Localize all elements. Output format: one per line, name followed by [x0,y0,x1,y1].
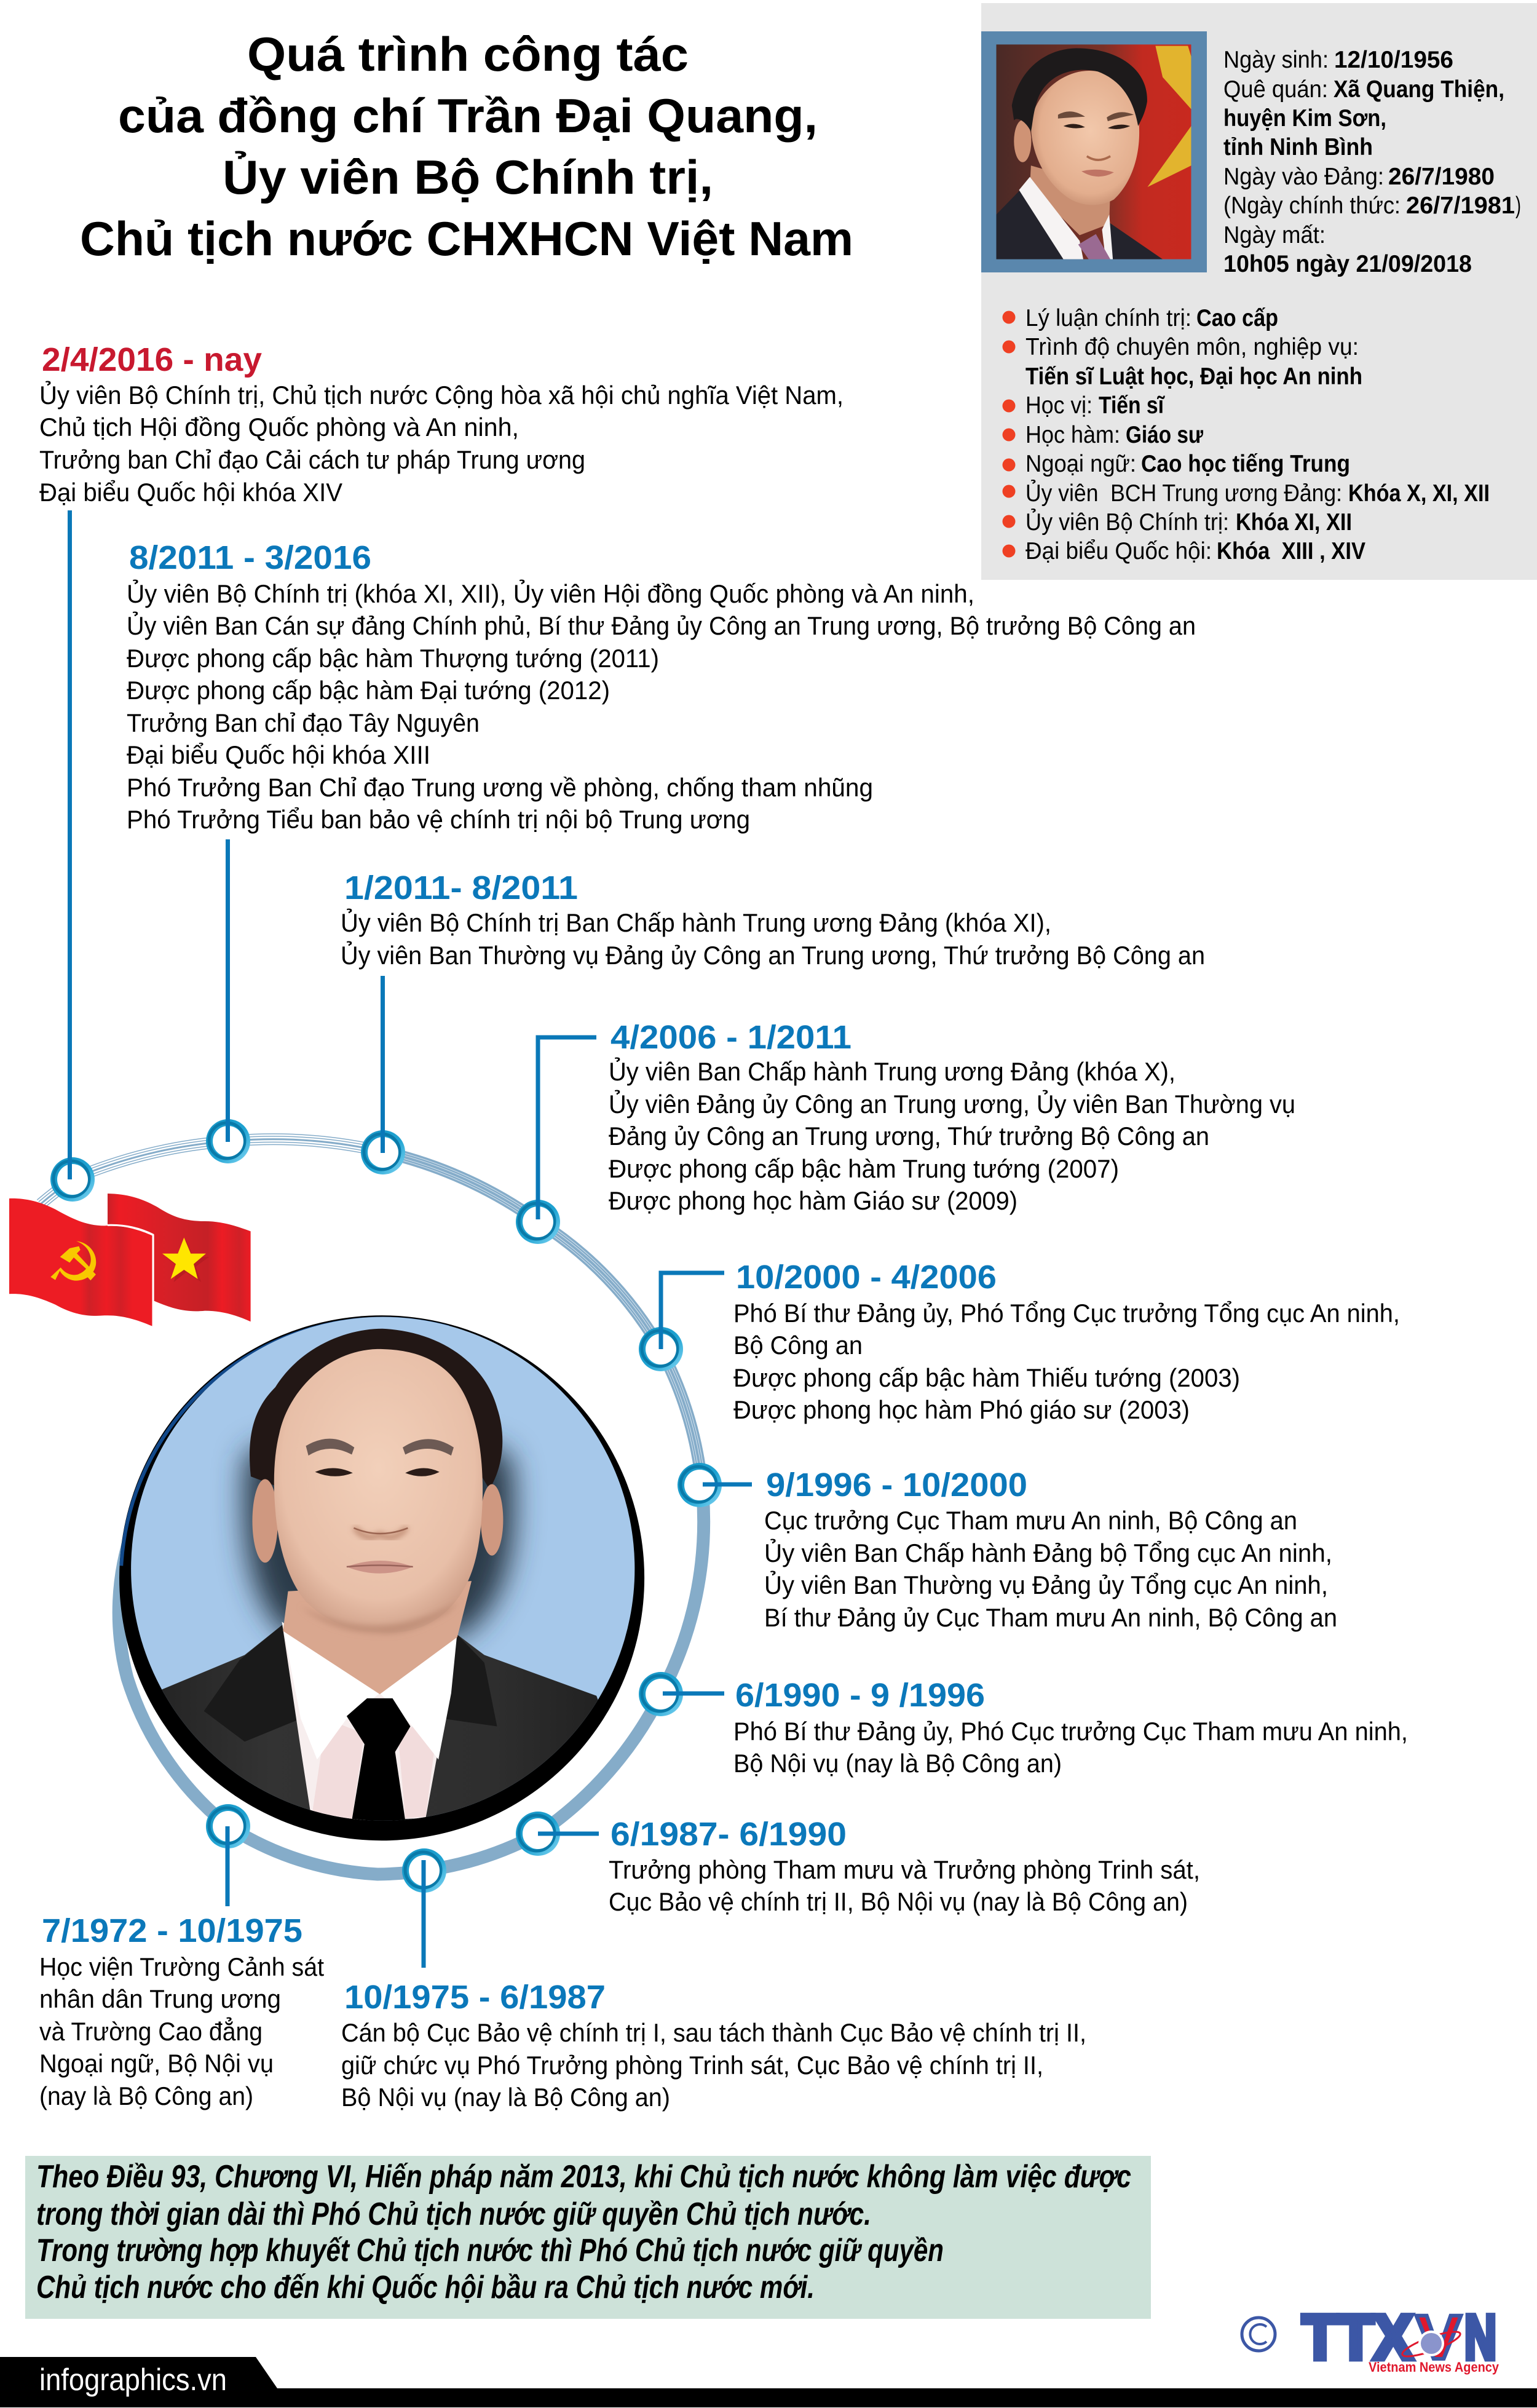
milestone: 4/2006 - 1/2011 [609,1019,1295,1215]
milestone: 10/1975 - 6/1987: giữ chức vụ Phó Trưởng phòng Trinh sát, Cục Bảo vệ chính trị II, [341,2051,1043,2080]
milestone: 10/2000 - 4/2006: 10/2000 - 4/2006 [736,1259,997,1296]
milestone: 9/1996 - 10/2000: Cục trưởng Cục Tham mưu An ninh, Bộ Công an [764,1506,1297,1535]
logo: TTXVN: N [1464,2302,1496,2372]
milestone: 6/1990 - 9/1996: Bộ Nội vụ (nay là Bộ Công an) [733,1749,1062,1778]
milestone: 4/2006 - 1/2011: Ủy viên Đảng ủy Công an Trung ương, Ủy viên Ban Thường vụ [609,1089,1295,1119]
node and connector: 1987 [516,1812,599,1856]
milestone: 10/2000 - 4/2006: Bộ Công an [733,1331,863,1360]
milestone: 7/1972 - 10/1975: 7/1972 - 10/1975 [42,1912,302,1949]
timeline ring [41,1139,704,1874]
milestone: 6/1990 - 9/1996: Phó Bí thư Đảng ủy, Phó Cục trưởng Cục Tham mưu An ninh, [733,1717,1408,1746]
credentials list: Cao học tiếng Trung [1141,451,1350,477]
credentials list: Trình độ chuyên môn, nghiệp vụ: [1025,334,1359,360]
milestone: 8/2011 - 3/2016: Đại biểu Quốc hội khóa XIII [127,740,430,769]
milestone: 10/2000 - 4/2006 [733,1259,1400,1424]
personal details: ) [1515,192,1521,219]
personal details: 26/7/1980 [1388,164,1495,190]
milestone: 10/2000 - 4/2006: Phó Bí thư Đảng ủy, Phó Tổng Cục trưởng Tổng cục An ninh, [733,1299,1400,1328]
milestone: 7/1972 - 10/1975 [39,1912,324,2110]
milestone: 8/2011 - 3/2016: Được phong cấp bậc hàm Đại tướng (2012) [127,676,610,705]
logo: TTXVN: V [1416,2302,1461,2372]
milestone: 2/4/2016 - nay: Đại biểu Quốc hội khóa XIV [39,478,342,507]
credentials list: Khóa XIII , XIV [1217,538,1365,564]
footer bar: infographics.vn [39,2362,227,2397]
credentials list: Lý luận chính trị: [1025,305,1191,331]
milestone: 7/1972 - 10/1975: Ngoại ngữ, Bộ Nội vụ [39,2049,274,2078]
callout: constitution note: Theo Điều 93, Chương VI, Hiến pháp năm 2013, khi Chủ tịch nước không làm việc được [36,2159,1131,2195]
milestone: 8/2011 - 3/2016: 8/2011 - 3/2016 [129,539,371,576]
milestone: 7/1972 - 10/1975: Học viện Trường Cảnh sát [39,1952,324,1981]
milestone: 6/1987 - 6/1990: Cục Bảo vệ chính trị II, Bộ Nội vụ (nay là Bộ Công an) [609,1887,1188,1916]
personal details: 10h05 ngày 21/09/2018 [1223,251,1472,277]
central portrait [119,1315,644,1841]
milestone: 4/2006 - 1/2011: 4/2006 - 1/2011 [610,1019,851,1056]
node and connector: 1975 [402,1848,446,1968]
icon: copyright [1242,2318,1275,2351]
credentials list: Ủy viên Bộ Chính trị: [1025,509,1229,536]
milestone: 7/1972 - 10/1975: (nay là Bộ Công an) [39,2081,253,2110]
milestone: 8/2011 - 3/2016: Phó Trưởng Ban Chỉ đạo Trung ương về phòng, chống tham nhũng [127,773,873,802]
node and connector: 1996 [678,1463,752,1507]
milestone: 7/1972 - 10/1975: nhân dân Trung ương [39,1984,281,2013]
callout: constitution note: Trong trường hợp khuyết Chủ tịch nước thì Phó Chủ tịch nước giữ quyền [36,2233,944,2268]
flag: Communist Party [9,1198,152,1326]
callout: constitution note: trong thời gian dài thì Phó Chủ tịch nước giữ quyền Chủ tịch nước. [36,2196,871,2232]
credentials list: Ngoại ngữ: [1025,451,1136,477]
milestone: 7/1972 - 10/1975: và Trường Cao đẳng [39,2016,263,2046]
credentials list: Ủy viên BCH Trung ương Đảng: [1025,480,1342,507]
portrait photo frame [981,31,1207,272]
logo: TTXVN: TTX [1302,2302,1413,2372]
milestone: 2/4/2016 - nay: Chủ tịch Hội đồng Quốc phòng và An ninh, [39,413,519,442]
milestone: 6/1987 - 6/1990: Trưởng phòng Tham mưu và Trưởng phòng Trinh sát, [609,1855,1200,1884]
milestone: 6/1990 - 9/1996: 6/1990 - 9 /1996 [735,1677,985,1714]
milestone: 6/1987 - 6/1990: 6/1987- 6/1990 [610,1816,847,1853]
personal details [1223,47,1521,277]
credentials list: Tiến sĩ Luật học, Đại học An ninh [1025,363,1362,390]
milestone: 2/4/2016 - nay [39,341,844,507]
credentials list: Khóa XI, XII [1236,509,1352,536]
milestone: 6/1990 - 9/1996 [733,1677,1408,1778]
credentials list: Học hàm: [1025,422,1120,448]
node and connector: 2011 [361,976,405,1174]
milestone: 4/2006 - 1/2011: Ủy viên Ban Chấp hành Trung ương Đảng (khóa X), [609,1056,1175,1086]
personal details: Quê quán: [1223,76,1328,103]
milestone: 10/1975 - 6/1987: 10/1975 - 6/1987 [344,1979,606,2016]
title [80,27,853,266]
milestone: 8/2011 - 3/2016: Ủy viên Ban Cán sự đảng Chính phủ, Bí thư Đảng ủy Công an Trung ương, Bộ trưởng Bộ Công an [127,611,1196,640]
callout: constitution note [25,2156,1151,2319]
milestone: 1/2011 - 8/2011 [341,869,1205,970]
milestone: 4/2006 - 1/2011: Được phong cấp bậc hàm Trung tướng (2007) [609,1154,1119,1183]
flag: Vietnam [108,1194,251,1321]
personal details: Ngày mất: [1223,222,1326,248]
milestone: 10/1975 - 6/1987 [341,1979,1086,2112]
credentials list: Cao cấp [1196,305,1278,331]
milestone: 10/2000 - 4/2006: Được phong học hàm Phó giáo sư (2003) [733,1395,1190,1424]
milestone: 4/2006 - 1/2011: Đảng ủy Công an Trung ương, Thứ trưởng Bộ Công an [609,1122,1209,1151]
credentials list [1002,305,1490,564]
personal details: 12/10/1956 [1334,47,1453,73]
panel: biography [981,3,1537,580]
node and connector: 1972 [206,1804,250,1906]
milestone: 8/2011 - 3/2016: Trưởng Ban chỉ đạo Tây Nguyên [127,708,480,737]
milestone: 1/2011 - 8/2011: 1/2011- 8/2011 [344,869,578,906]
personal details: Ngày sinh: [1223,47,1329,73]
node and connector: 1990 [639,1672,724,1716]
title: Ủy viên Bộ Chính trị, [223,150,713,204]
milestone: 4/2006 - 1/2011: Được phong học hàm Giáo sư (2009) [609,1186,1017,1215]
logo: TTXVN: Vietnam News Agency [1369,2359,1499,2375]
personal details: Ngày vào Đảng: [1223,164,1384,190]
milestone: 8/2011 - 3/2016: Ủy viên Bộ Chính trị (khóa XI, XII), Ủy viên Hội đồng Quốc phòng và An ninh, [127,579,974,608]
milestone: 8/2011 - 3/2016: Được phong cấp bậc hàm Thượng tướng (2011) [127,644,659,673]
milestone: 9/1996 - 10/2000: Bí thư Đảng ủy Cục Tham mưu An ninh, Bộ Công an [764,1603,1337,1632]
callout: constitution note: Chủ tịch nước cho đến khi Quốc hội bầu ra Chủ tịch nước mới. [36,2270,815,2305]
milestone: 6/1987 - 6/1990 [609,1816,1200,1916]
node and connector: 2016 [50,510,95,1202]
footer bar [0,2357,1537,2407]
logo: TTXVN [1242,2302,1499,2375]
milestone: 10/1975 - 6/1987: Bộ Nội vụ (nay là Bộ Công an) [341,2083,670,2112]
milestone: 9/1996 - 10/2000: Ủy viên Ban Thường vụ Đảng ủy Tổng cục An ninh, [764,1570,1328,1599]
milestone: 1/2011 - 8/2011: Ủy viên Bộ Chính trị Ban Chấp hành Trung ương Đảng (khóa XI), [341,908,1051,937]
flags [9,1194,251,1326]
personal details: (Ngày chính thức: [1223,192,1401,219]
personal details: 26/7/1981 [1406,192,1515,219]
milestone: 10/2000 - 4/2006: Được phong cấp bậc hàm Thiếu tướng (2003) [733,1363,1240,1392]
personal details: huyện Kim Sơn, [1223,105,1386,132]
credentials list: Tiến sĩ [1099,392,1165,419]
milestone: 10/1975 - 6/1987: Cán bộ Cục Bảo vệ chính trị I, sau tách thành Cục Bảo vệ chính trị II, [341,2018,1086,2047]
milestone: 2/4/2016 - nay: Trưởng ban Chỉ đạo Cải cách tư pháp Trung ương [39,445,585,474]
milestone: 9/1996 - 10/2000: 9/1996 - 10/2000 [766,1467,1027,1503]
milestone: 1/2011 - 8/2011: Ủy viên Ban Thường vụ Đảng ủy Công an Trung ương, Thứ trưởng Bộ Công an [341,940,1205,970]
title: của đồng chí Trần Đại Quang, [118,89,818,143]
milestone: 2/4/2016 - nay: 2/4/2016 - nay [42,341,262,378]
credentials list: Giáo sư [1126,422,1204,448]
milestone: 8/2011 - 3/2016: Phó Trưởng Tiểu ban bảo vệ chính trị nội bộ Trung ương [127,805,750,834]
milestone: 9/1996 - 10/2000: Ủy viên Ban Chấp hành Đảng bộ Tổng cục An ninh, [764,1538,1332,1567]
personal details: tỉnh Ninh Bình [1223,134,1373,160]
milestone: 9/1996 - 10/2000 [764,1467,1337,1632]
title: Quá trình công tác [247,27,689,81]
credentials list: Đại biểu Quốc hội: [1025,538,1212,564]
credentials list: Học vị: [1025,392,1092,419]
milestone: 8/2011 - 3/2016 [127,539,1196,834]
milestone: 2/4/2016 - nay: Ủy viên Bộ Chính trị, Chủ tịch nước Cộng hòa xã hội chủ nghĩa Việt Nam, [39,380,844,410]
credentials list: Khóa X, XI, XII [1348,480,1490,507]
node and connector: 2000 [639,1273,724,1371]
personal details: Xã Quang Thiện, [1334,76,1504,103]
node and connector: 2011-2016 [206,839,250,1163]
node and connector: 2006 [516,1037,596,1244]
title: Chủ tịch nước CHXHCN Việt Nam [80,212,853,266]
